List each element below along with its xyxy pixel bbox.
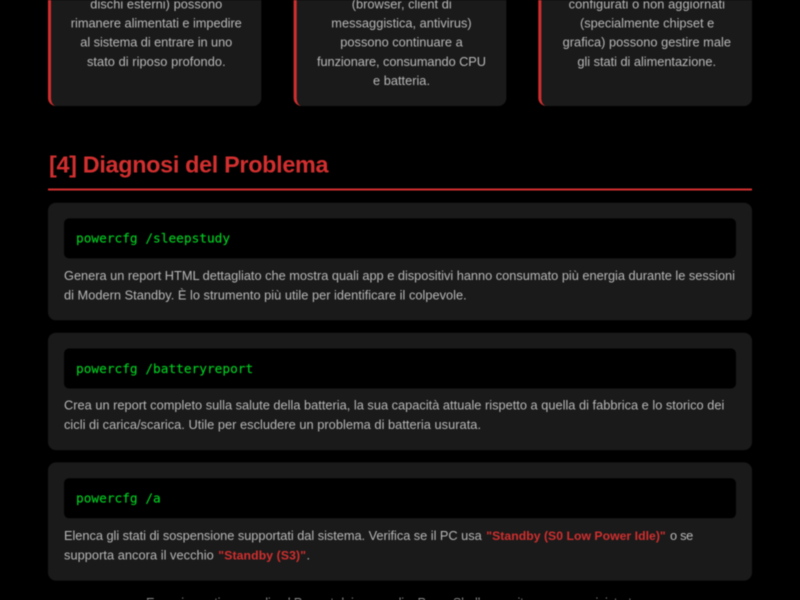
- panel: cause card, background apps: messaggistica, antivirus): [331, 15, 472, 30]
- command: batteryreport: [64, 348, 736, 388]
- panel: cause card, background apps: possono continuare a: [340, 35, 464, 50]
- panel: cause card, external devices: stato di riposo profondo.: [87, 54, 226, 69]
- description: sleep states: [64, 528, 693, 562]
- description: sleepstudy: [64, 268, 735, 302]
- panel: cause card, external devices: al sistema di entrare in uno: [80, 35, 232, 50]
- panel: powercfg a: [48, 462, 752, 581]
- heading: section 4: [4] Diagnosi del Problema: [49, 151, 329, 177]
- description: sleep states: .: [306, 547, 310, 562]
- panel: powercfg batteryreport: [48, 333, 752, 450]
- command: sleepstudy: powercfg /sleepstudy: [76, 231, 230, 246]
- command: a: [64, 478, 736, 518]
- panel: cause card, background apps: e batteria.: [373, 73, 430, 88]
- description: sleepstudy: Genera un report HTML dettagliato che mostra quali app e dispositivi hanno consumato più energia durante le sessioni: [64, 268, 735, 283]
- description: sleep states: o se: [670, 528, 693, 543]
- description: batteryreport: Crea un report completo sulla salute della batteria, la sua capacità attuale rispetto a quella di fabbrica e lo storico dei: [64, 398, 724, 413]
- panel: cause card, external devices: [48, 0, 261, 106]
- description: sleepstudy: di Modern Standby. È lo strumento più utile per identificare il colpevole.: [64, 287, 467, 302]
- description: sleep states: "Standby (S3)": [218, 548, 306, 562]
- panel: cause card, drivers: (specialmente chipset e: [580, 15, 714, 30]
- panel: powercfg sleepstudy: [48, 203, 752, 320]
- panel: cause card, drivers: gli stati di alimentazione.: [577, 54, 716, 69]
- panel: cause card, background apps: [294, 0, 506, 106]
- panel: cause card, external devices: rimanere alimentati e impedire: [71, 15, 242, 30]
- command: batteryreport: powercfg /batteryreport: [76, 362, 253, 377]
- panel: cause card, drivers: [538, 0, 752, 106]
- panel: cause card, drivers: grafica) possono gestire male: [563, 35, 731, 50]
- description: batteryreport: [64, 398, 724, 432]
- command: a: powercfg /a: [76, 492, 161, 507]
- command: sleepstudy: [64, 218, 736, 258]
- panel: cause card, background apps: funzionare, consumando CPU: [317, 54, 486, 69]
- description: sleep states: supporta ancora il vecchio: [64, 547, 214, 562]
- description: batteryreport: cicli di carica/scarica. Utile per escludere un problema di batteria usurata.: [64, 417, 481, 432]
- description: sleep states: "Standby (S0 Low Power Idle)": [486, 529, 666, 543]
- description: sleep states: Elenca gli stati di sospensione supportati dal sistema. Verifica se il PC usa: [64, 528, 483, 543]
